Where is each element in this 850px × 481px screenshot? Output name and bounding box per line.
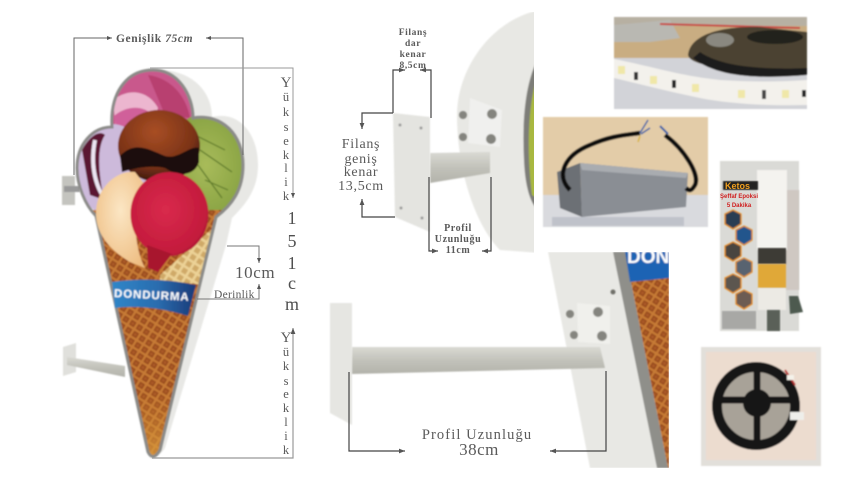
dimension: depth 10cm: Derinlik (214, 289, 255, 301)
label: 151cm: 1 (288, 208, 296, 228)
label: 151cm: 1 (288, 253, 296, 273)
dimension: flange narrow edge: kenar (400, 50, 427, 60)
scoop: pink (112, 70, 192, 128)
label: lower Yükseklik: k (283, 443, 290, 457)
photo: LED power driver (543, 117, 708, 227)
label: upper Yükseklik: ü (283, 90, 290, 104)
package product name: 5 Dakika (727, 203, 752, 209)
photo: LED reel in bag (701, 347, 821, 466)
dimension: profile length 11cm: Profil (444, 223, 472, 234)
label: upper Yükseklik: e (283, 134, 289, 148)
label: lower Yükseklik: e (283, 387, 289, 401)
panel: profile arm side view (330, 247, 669, 468)
label: upper Yükseklik: l (284, 161, 288, 175)
dimension: height 151cm (150, 68, 299, 458)
dimension: depth 10cm: 10cm (235, 263, 275, 282)
label: 151cm: m (285, 294, 299, 314)
sign edge with cone graphic (548, 247, 669, 468)
sign edge with cone graphic: DON (627, 247, 669, 268)
wall flange plate (330, 303, 352, 425)
sign flange with bolts (459, 98, 502, 147)
package product name: Şeffaf Epoksi (720, 194, 758, 200)
panel: bracket close-up (338, 10, 540, 256)
dimension: width 75cm: Genişlik 75cm (116, 33, 193, 45)
sign side depth (152, 70, 258, 457)
sign face with scoops and cone (70, 65, 250, 465)
label: lower Yükseklik: k (283, 359, 290, 373)
dimension: flange wide edge: kenar (344, 165, 378, 180)
wall flange plate (393, 113, 430, 232)
dimension: profile length 38cm: Profil Uzunluğu (422, 427, 532, 443)
dimension: flange narrow edge: 8,5cm (399, 61, 427, 71)
sign side circle (457, 10, 540, 253)
scoop: pistachio green (182, 116, 242, 212)
label: upper Yükseklik: k (283, 148, 290, 162)
dimension: depth 10cm (197, 246, 275, 301)
dimension: profile length 11cm: Uzunluğu (435, 234, 481, 245)
label: lower Yükseklik: l (284, 415, 288, 429)
dimension: profile length 11cm: 11cm (446, 245, 470, 256)
label: upper Yükseklik: s (284, 120, 289, 134)
dimension: profile length 11cm (429, 177, 491, 256)
dimension: profile length 38cm: 38cm (459, 440, 499, 459)
icon: upper wall bracket (62, 176, 80, 205)
dimension: flange narrow edge: dar (405, 39, 421, 49)
profile arm (352, 347, 605, 374)
label: upper Yükseklik: i (284, 175, 288, 189)
dimension: flange wide edge: 13,5cm (338, 179, 384, 194)
dimension: flange wide edge: geniş (344, 152, 378, 167)
icon: lower wall bracket (63, 343, 125, 377)
photo: epoxy syringe package (720, 161, 803, 331)
profile arm (430, 152, 490, 183)
panel: ice cream cone sign (62, 65, 258, 465)
cone waffle (90, 210, 225, 465)
label: upper Yükseklik: k (283, 105, 290, 119)
scoop: lilac swirl (76, 124, 148, 216)
dimension: flange wide edge: Filanş (342, 137, 380, 152)
label: upper Yükseklik: k (283, 189, 290, 203)
label: 151cm: 5 (288, 231, 296, 251)
dimension: flange narrow edge (393, 28, 431, 118)
label: lower Yükseklik: ü (283, 345, 290, 359)
dimension: flange wide edge (338, 113, 395, 217)
scoop: cream (96, 172, 145, 268)
label: upper Yükseklik: Y (281, 75, 292, 91)
dimension: width 75cm (74, 33, 243, 175)
photo: LED strip roll (614, 17, 807, 109)
material hexagon icons (725, 210, 752, 309)
label: lower Yükseklik: i (284, 429, 288, 443)
dimension: profile length 38cm (349, 371, 606, 459)
package fine print (722, 311, 756, 329)
label: lower Yükseklik: k (283, 401, 290, 415)
banner: DONDURMA (112, 280, 196, 316)
label: 151cm: c (288, 273, 296, 293)
dimension: flange narrow edge: Filanş (399, 28, 427, 38)
package brand: Ketos (725, 181, 750, 191)
sign flange with bolts (566, 290, 616, 344)
label: lower Yükseklik: Y (281, 330, 292, 346)
scoop: red (130, 172, 208, 272)
scoop: chocolate (118, 110, 200, 182)
banner: DONDURMA: DONDURMA (114, 288, 190, 304)
label: lower Yükseklik: s (284, 374, 289, 388)
